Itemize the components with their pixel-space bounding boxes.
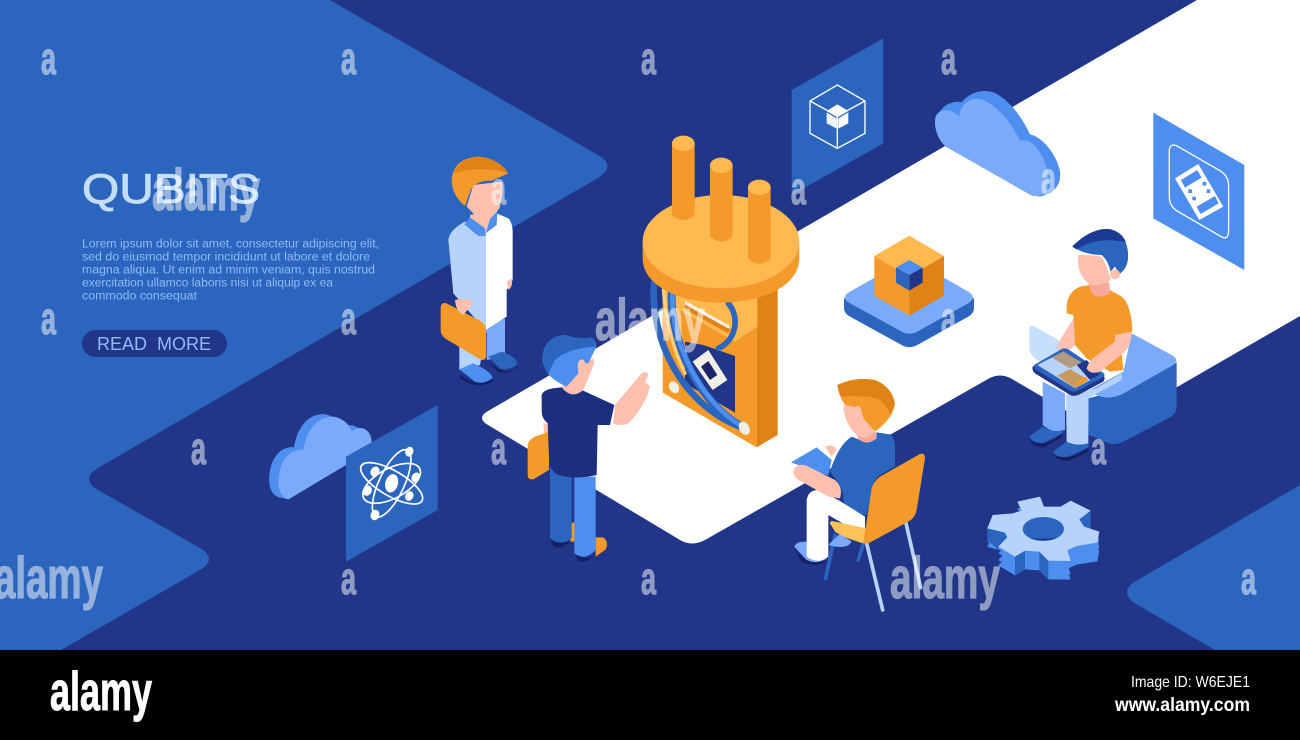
machine body xyxy=(663,287,778,447)
text block: lorem ipsum description: exercitation ullamco laboris nisi ut aliquip ex ea xyxy=(82,278,334,290)
watermark: repeated stock mark: a xyxy=(341,33,357,84)
panel: left blue banner shape xyxy=(0,0,608,650)
watermark: repeated stock mark: a xyxy=(1241,553,1257,604)
watermark: repeated stock mark: a xyxy=(41,33,57,84)
rods xyxy=(672,136,771,264)
person: seated with tablet on cube seat xyxy=(1029,229,1177,461)
tablet and arm xyxy=(791,446,841,498)
seat xyxy=(1087,333,1177,444)
watermark: repeated stock mark: a xyxy=(641,33,657,84)
person: seated on orange chair xyxy=(791,379,925,610)
white isometric floor band xyxy=(482,0,1300,544)
person: scientist in lab coat xyxy=(441,157,517,385)
watermark: repeated stock mark: a xyxy=(191,423,207,474)
icon: cube on pedestal xyxy=(844,236,974,347)
chair legs xyxy=(826,522,921,610)
gear top face xyxy=(987,497,1099,561)
chair xyxy=(830,454,925,543)
text block: lorem ipsum description: sed do eiusmod tempor incididunt ut labore et dolore xyxy=(82,252,370,264)
footer logo: alamy xyxy=(50,660,152,722)
watermark: repeated stock mark: alamy xyxy=(152,158,260,223)
title: QUBITS xyxy=(82,165,260,212)
disc xyxy=(643,195,799,303)
gear extruded side xyxy=(987,503,1099,580)
watermark: repeated stock mark: a xyxy=(641,553,657,604)
watermark: repeated stock mark: a xyxy=(791,163,807,214)
icon: cloud upper xyxy=(935,91,1060,197)
person: man pointing at machine xyxy=(528,335,650,562)
watermark: repeated stock mark: a xyxy=(41,293,57,344)
panel icon: chip tile xyxy=(1153,113,1244,270)
watermark: repeated stock mark: a xyxy=(1091,423,1107,474)
left arm xyxy=(1055,318,1075,353)
watermark: repeated stock mark: a xyxy=(941,293,957,344)
footer image id: Image ID: W6EJE1 xyxy=(1131,674,1250,691)
button: read more: READ MORE xyxy=(97,334,211,354)
panel icon: atom tile xyxy=(346,405,438,562)
shoes xyxy=(794,533,852,565)
laptop glass xyxy=(1029,326,1060,362)
tablet xyxy=(1032,348,1105,396)
icon: gear xyxy=(987,497,1099,580)
cables xyxy=(654,283,752,437)
torso xyxy=(830,432,895,515)
watermark: repeated stock mark: a xyxy=(491,163,507,214)
head xyxy=(837,379,895,442)
watermark: repeated stock mark: a xyxy=(491,423,507,474)
icon: cloud lower left xyxy=(269,414,372,499)
head xyxy=(1072,229,1128,297)
text block: lorem ipsum description: magna aliqua. Ut enim ad minim veniam, quis nostrud xyxy=(82,264,375,276)
watermark: repeated stock mark: a xyxy=(341,553,357,604)
legs xyxy=(1029,373,1122,461)
text block: lorem ipsum description xyxy=(82,238,379,302)
text block: lorem ipsum description: commodo consequat xyxy=(82,290,198,302)
watermark: repeated stock mark: a xyxy=(941,33,957,84)
watermark: repeated stock mark: alamy xyxy=(595,288,705,353)
footer website: www.alamy.com xyxy=(1114,695,1250,716)
panel icon: cube tile xyxy=(792,38,883,195)
panel: bottom-right blue shape xyxy=(1127,485,1300,650)
footer bar xyxy=(0,650,1300,740)
button: read more xyxy=(82,330,227,357)
watermark: repeated stock mark: alamy xyxy=(890,546,1000,611)
torso xyxy=(1067,285,1132,372)
text block: lorem ipsum description: Lorem ipsum dolor sit amet, consectetur adipiscing elit, xyxy=(82,238,379,250)
white pants xyxy=(807,490,865,561)
watermark: repeated stock mark: a xyxy=(1041,153,1057,204)
quantum machine xyxy=(643,136,799,447)
watermark: repeated stock mark: a xyxy=(341,293,357,344)
right arm xyxy=(1087,332,1132,373)
watermark: repeated stock mark xyxy=(0,33,1257,611)
